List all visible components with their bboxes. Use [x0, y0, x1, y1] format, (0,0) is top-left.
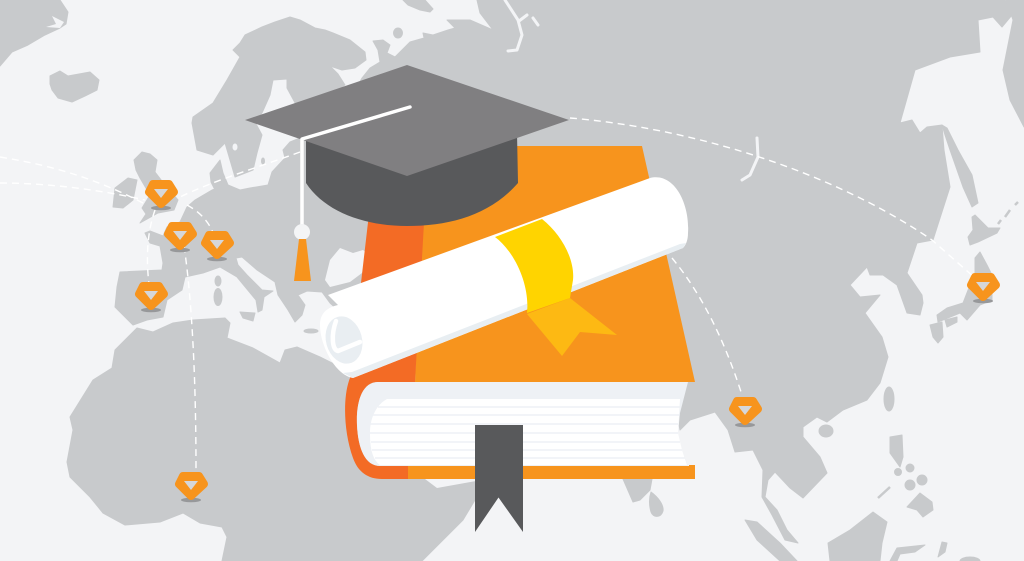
route: book to Myanmar: [672, 258, 742, 395]
book: [345, 146, 695, 532]
route: Atlantic upper: [0, 157, 145, 204]
location pins: [139, 184, 996, 502]
pin: West Africa: [179, 476, 204, 502]
land: Gotland: [262, 158, 264, 164]
pin: Italy: [205, 235, 230, 261]
water: inland seas and gulfs: [46, 0, 758, 488]
land: Sardinia: [214, 288, 222, 306]
land: Halmahera and New Guinea: [938, 542, 980, 561]
water: Gulf of Ob: [505, 0, 538, 51]
book: front cover: [415, 146, 695, 382]
water: Lake Baikal: [742, 138, 758, 180]
land: Novaya Zemlya: [403, 0, 433, 12]
cap: tassel knob: [294, 224, 310, 240]
book: bottom cover: [408, 465, 695, 479]
graduation cap: [245, 65, 569, 281]
land: Denmark: [210, 160, 228, 190]
land: Philippines: [878, 435, 933, 517]
water: Black Sea: [325, 248, 370, 287]
book: bookmark ribbon: [475, 425, 523, 532]
land: Sri Lanka: [650, 492, 663, 516]
book: page stripes: [370, 399, 687, 465]
land: small arctic island: [394, 28, 402, 38]
book: page block: [357, 382, 688, 466]
cap: tassel cord: [302, 107, 410, 228]
water: Red Sea wedge: [425, 479, 476, 488]
land: Kyushu: [930, 322, 943, 343]
pin: Myanmar: [733, 401, 758, 427]
water: Swedish lake: [232, 144, 238, 150]
pin: United Kingdom: [149, 184, 174, 210]
route: France to West Africa: [180, 222, 196, 470]
land: Shikoku: [945, 317, 957, 327]
route: Britain to Italy: [187, 205, 216, 245]
land: Africa: [67, 318, 480, 561]
land: Crete: [304, 329, 318, 333]
route: Britain to Spain: [147, 210, 155, 292]
dashed routes: [0, 118, 975, 470]
diploma: underside shading: [343, 243, 686, 378]
land: Corsica: [215, 276, 221, 286]
land: Borneo: [828, 512, 887, 561]
land: Sakhalin: [942, 125, 978, 207]
land: Sumatra: [745, 520, 797, 561]
land: Honshu: [937, 252, 992, 322]
diploma: rolled end: [320, 312, 368, 368]
land: Greenland: [0, 0, 68, 66]
book: spine and back curve: [345, 205, 425, 479]
route: Atlantic lower: [0, 183, 145, 200]
land: Kamchatka: [1003, 0, 1024, 127]
route: Baltic to Britain: [180, 152, 300, 197]
route: cap to Japan: [570, 118, 975, 278]
diploma: [320, 177, 688, 378]
diploma: ribbon tail: [527, 298, 617, 356]
water: Greenland inlet: [46, 16, 64, 28]
land: Great Britain: [134, 152, 178, 223]
cap: mortarboard: [245, 65, 569, 176]
land: Sulawesi: [890, 545, 925, 561]
land: Sicily: [240, 312, 255, 321]
pin: France: [168, 226, 193, 252]
land: Hainan: [819, 425, 833, 437]
land: Hokkaido: [968, 215, 1000, 245]
diploma: paper roll: [320, 177, 688, 378]
pin: Spain: [139, 286, 164, 312]
pin: Japan: [971, 277, 996, 303]
cap: tassel: [294, 239, 311, 281]
diploma: yellow band: [495, 219, 573, 313]
land: Taiwan: [884, 387, 894, 411]
land: Kuril islands: [998, 202, 1018, 224]
land: Ireland: [113, 178, 137, 208]
land: Iceland: [50, 71, 99, 102]
cap: base: [306, 133, 518, 226]
land: Scandinavia and Finland: [192, 17, 366, 177]
